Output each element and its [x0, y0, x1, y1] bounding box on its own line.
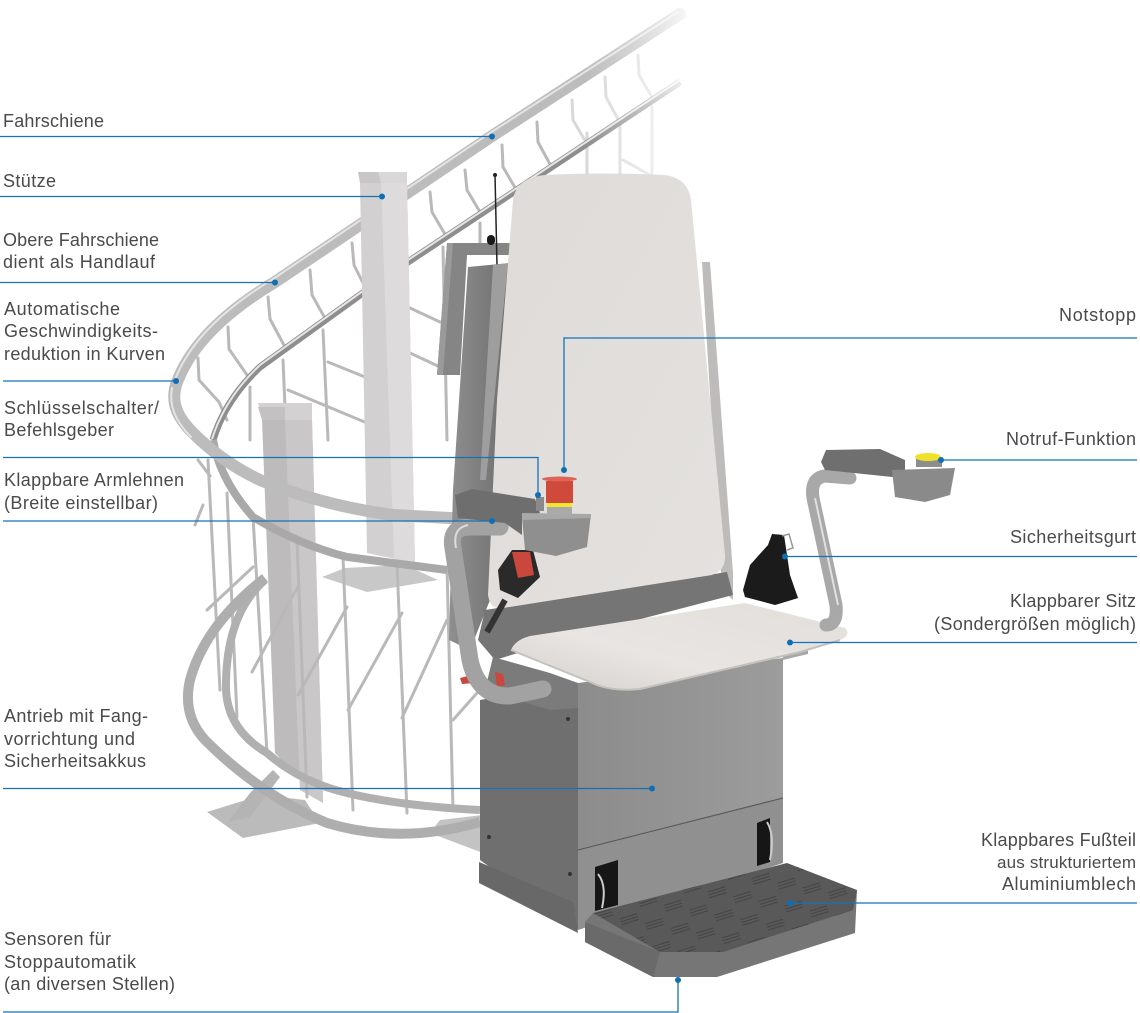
callout: Obere Fahrschiene — [0, 230, 278, 286]
left control box — [522, 513, 591, 556]
callout: Notstopp — [561, 305, 1137, 473]
footrest — [585, 863, 857, 977]
front travel rail mid section — [213, 440, 447, 570]
front support post — [258, 403, 323, 803]
callout: Sensoren — [3, 929, 681, 1012]
seat — [511, 603, 848, 690]
callout: Antrieb — [3, 706, 655, 792]
rear support post — [358, 172, 415, 563]
callout: Klappbarer Sitz: Klappbarer Sitz — [1010, 591, 1136, 611]
callout: Stütze: Stütze — [3, 171, 56, 191]
front arc of handrail — [171, 385, 500, 523]
emergency stop button — [542, 476, 577, 515]
lower travel rail — [212, 80, 680, 440]
footrest hinge slots — [595, 818, 772, 911]
right control box — [892, 468, 955, 502]
callout: Fahrschiene — [0, 111, 495, 140]
seat belt buckle — [498, 550, 540, 598]
callout: Automatische Geschwindigkeitsreduktion: reduktion in Kurven — [4, 344, 165, 364]
antenna — [487, 173, 497, 265]
front post base plate — [207, 795, 320, 838]
callout: Stütze — [0, 171, 385, 200]
footrest tread plate — [593, 863, 857, 952]
right base plate — [430, 815, 483, 853]
back balusters — [198, 55, 653, 440]
callout: Automatische Geschwindigkeitsreduktion: Automatische — [4, 299, 120, 319]
rear frame strip — [702, 262, 733, 600]
vertical column — [449, 263, 510, 650]
callout: Automatische Geschwindigkeitsreduktion: Geschwindigkeits- — [4, 321, 158, 341]
footrest sides — [585, 890, 857, 977]
key switch — [536, 497, 544, 511]
seat belt retractor — [743, 534, 798, 605]
callout: Notruf-Funktion — [938, 429, 1137, 463]
seat bracket — [783, 644, 808, 660]
callout: Klappbares Fußteil: Aluminiumblech — [1002, 874, 1136, 894]
callout: Obere Fahrschiene: dient als Handlauf — [3, 252, 156, 272]
base strut — [228, 770, 280, 822]
fade-out of the rail at top right — [585, 0, 700, 176]
lower back support — [478, 572, 733, 660]
rail carriage under seat — [485, 657, 578, 710]
callout: Sicherheitsgurt: Sicherheitsgurt — [1010, 527, 1136, 547]
callout: Schlüsselschalter: Befehlsgeber — [4, 420, 114, 440]
seat belt strap — [487, 600, 505, 632]
upper rail (handrail) — [173, 12, 680, 385]
callout: Sensoren: (an diversen Stellen) — [4, 974, 175, 994]
callout: Schlüsselschalter: Schlüsselschalter/ — [4, 398, 159, 418]
housing base plinth — [479, 862, 578, 933]
callout: Notruf-Funktion: Notruf-Funktion — [1006, 429, 1136, 449]
callout: Automatische Geschwindigkeitsreduktion — [3, 299, 179, 384]
callout: Antrieb: Antrieb mit Fang- — [4, 706, 148, 726]
callout: Klappbarer Sitz: (Sondergrößen möglich) — [934, 614, 1136, 634]
left armrest pad — [455, 489, 540, 535]
callout: Antrieb: Sicherheitsakkus — [4, 751, 146, 771]
callout: Klappbares Fußteil — [787, 830, 1137, 906]
right armrest pad — [821, 449, 905, 477]
callout: Klappbare Armlehnen — [3, 470, 495, 524]
callout: Fahrschiene: Fahrschiene — [3, 111, 104, 131]
callout: Klappbares Fußteil: Klappbares Fußteil — [981, 830, 1136, 850]
callout: Antrieb: vorrichtung und — [4, 729, 135, 749]
drive housing — [480, 658, 783, 930]
staircase rail system — [171, 0, 700, 853]
callout: Klappbare Armlehnen: Klappbare Armlehnen — [4, 470, 184, 490]
callout: Klappbares Fußteil: aus strukturiertem — [997, 853, 1136, 872]
stairlift chair — [437, 173, 955, 977]
left armrest tube — [452, 525, 543, 696]
right armrest tube — [812, 476, 850, 625]
callout: Sensoren: Stoppautomatik — [4, 952, 137, 972]
rear bracket — [437, 243, 510, 375]
callout: Klappbare Armlehnen: (Breite einstellbar) — [4, 493, 158, 513]
callout: Sicherheitsgurt — [782, 527, 1137, 560]
callout: Notstopp: Notstopp — [1059, 305, 1136, 325]
emergency call button — [915, 453, 942, 467]
front balusters and cross bars — [195, 460, 477, 813]
red sensor — [460, 672, 505, 687]
rear post base plate — [322, 565, 438, 592]
callout: Klappbarer Sitz — [787, 591, 1137, 646]
callout: Obere Fahrschiene: Obere Fahrschiene — [3, 230, 159, 250]
callout: Sensoren: Sensoren für — [4, 929, 111, 949]
callout: Schlüsselschalter — [3, 398, 541, 498]
lower loop of rail — [188, 578, 480, 834]
backrest — [488, 174, 725, 608]
